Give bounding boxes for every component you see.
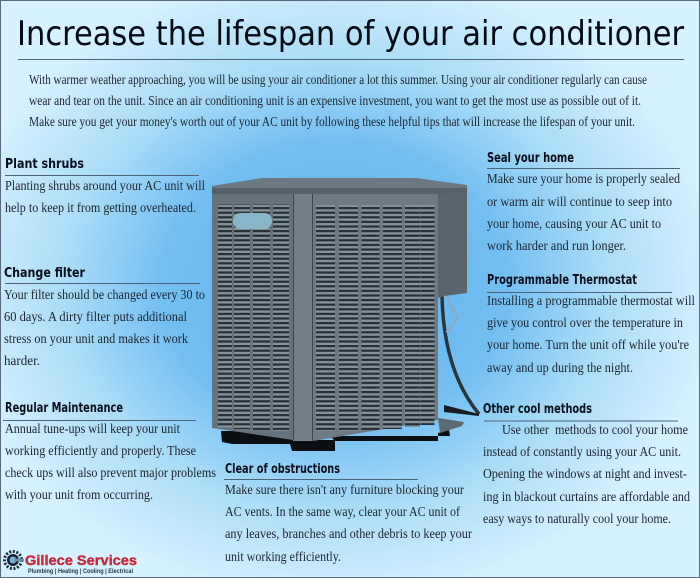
section: clear of obstructions: Make sure there isn't any furniture blocking your	[225, 482, 464, 497]
section: seal your home: or warm air will continue to seep into	[487, 194, 672, 209]
section: programmable thermostat	[487, 273, 695, 375]
feet	[221, 430, 450, 451]
section: plant shrubs	[5, 157, 205, 215]
icon: gear	[4, 552, 24, 568]
louvres left	[218, 204, 289, 431]
section: clear of obstructions: unit working efficiently.	[225, 549, 341, 564]
section: programmable thermostat: away and up during the night.	[487, 360, 633, 375]
section: other cool methods	[483, 402, 690, 526]
section: clear of obstructions: AC vents. In the same way, clear your AC unit of	[225, 504, 460, 519]
section: seal your home: Seal your home	[487, 151, 574, 166]
section: regular maintenance: check ups will also prevent major problems	[5, 465, 216, 480]
louvres right	[316, 205, 434, 431]
section: seal your home: Make sure your home is properly sealed	[487, 171, 680, 186]
section: change filter: harder.	[4, 353, 40, 368]
section: regular maintenance: working efficiently and properly. These	[5, 443, 196, 458]
section: other cool methods: Other cool methods	[483, 402, 592, 417]
section: plant shrubs: help to keep it from getting overheated.	[5, 200, 196, 215]
section: other cool methods: easy ways to naturally cool your home.	[483, 511, 671, 526]
section: regular maintenance: with your unit from occurring.	[5, 487, 153, 502]
logo: Gillece Services: Gillece Services	[25, 553, 137, 568]
section: programmable thermostat: Programmable Thermostat	[487, 273, 637, 288]
section: regular maintenance: Annual tune-ups will keep your unit	[5, 421, 180, 436]
intro text	[29, 72, 647, 129]
section: seal your home: work harder and run longer.	[487, 238, 626, 253]
section: change filter	[4, 266, 205, 368]
section: change filter: Your filter should be changed every 30 to	[4, 287, 205, 302]
section: regular maintenance	[3, 401, 216, 502]
logo: Gillece Services	[4, 552, 137, 575]
section: plant shrubs: Plant shrubs	[5, 157, 84, 172]
section: programmable thermostat: give you control over the temperature in	[487, 315, 683, 330]
corner post	[293, 193, 313, 441]
section: other cool methods: instead of constantly using your AC unit.	[483, 444, 681, 459]
section: clear of obstructions: Clear of obstructions	[225, 462, 340, 477]
section: change filter: stress on your unit and makes it work	[4, 331, 188, 346]
pipes	[438, 296, 479, 433]
section: plant shrubs: Planting shrubs around your AC unit will	[5, 178, 205, 193]
section: change filter: Change filter	[4, 266, 85, 281]
air conditioner unit illustration	[212, 178, 479, 451]
side box	[438, 192, 467, 298]
section: clear of obstructions: any leaves, branches and other debris to keep your	[225, 526, 472, 541]
section: clear of obstructions	[224, 462, 472, 564]
logo: Gillece Services: Plumbing | Heating | Cooling | Electrical	[28, 569, 133, 575]
top cover	[212, 178, 467, 192]
section: change filter: 60 days. A dirty filter puts additional	[4, 309, 187, 324]
left panel	[212, 193, 293, 440]
badge	[233, 213, 272, 229]
section: seal your home: your home, causing your AC unit to	[487, 216, 661, 231]
section: regular maintenance: Regular Maintenance	[5, 401, 123, 416]
section: seal your home	[487, 151, 680, 253]
right panel	[313, 194, 438, 441]
